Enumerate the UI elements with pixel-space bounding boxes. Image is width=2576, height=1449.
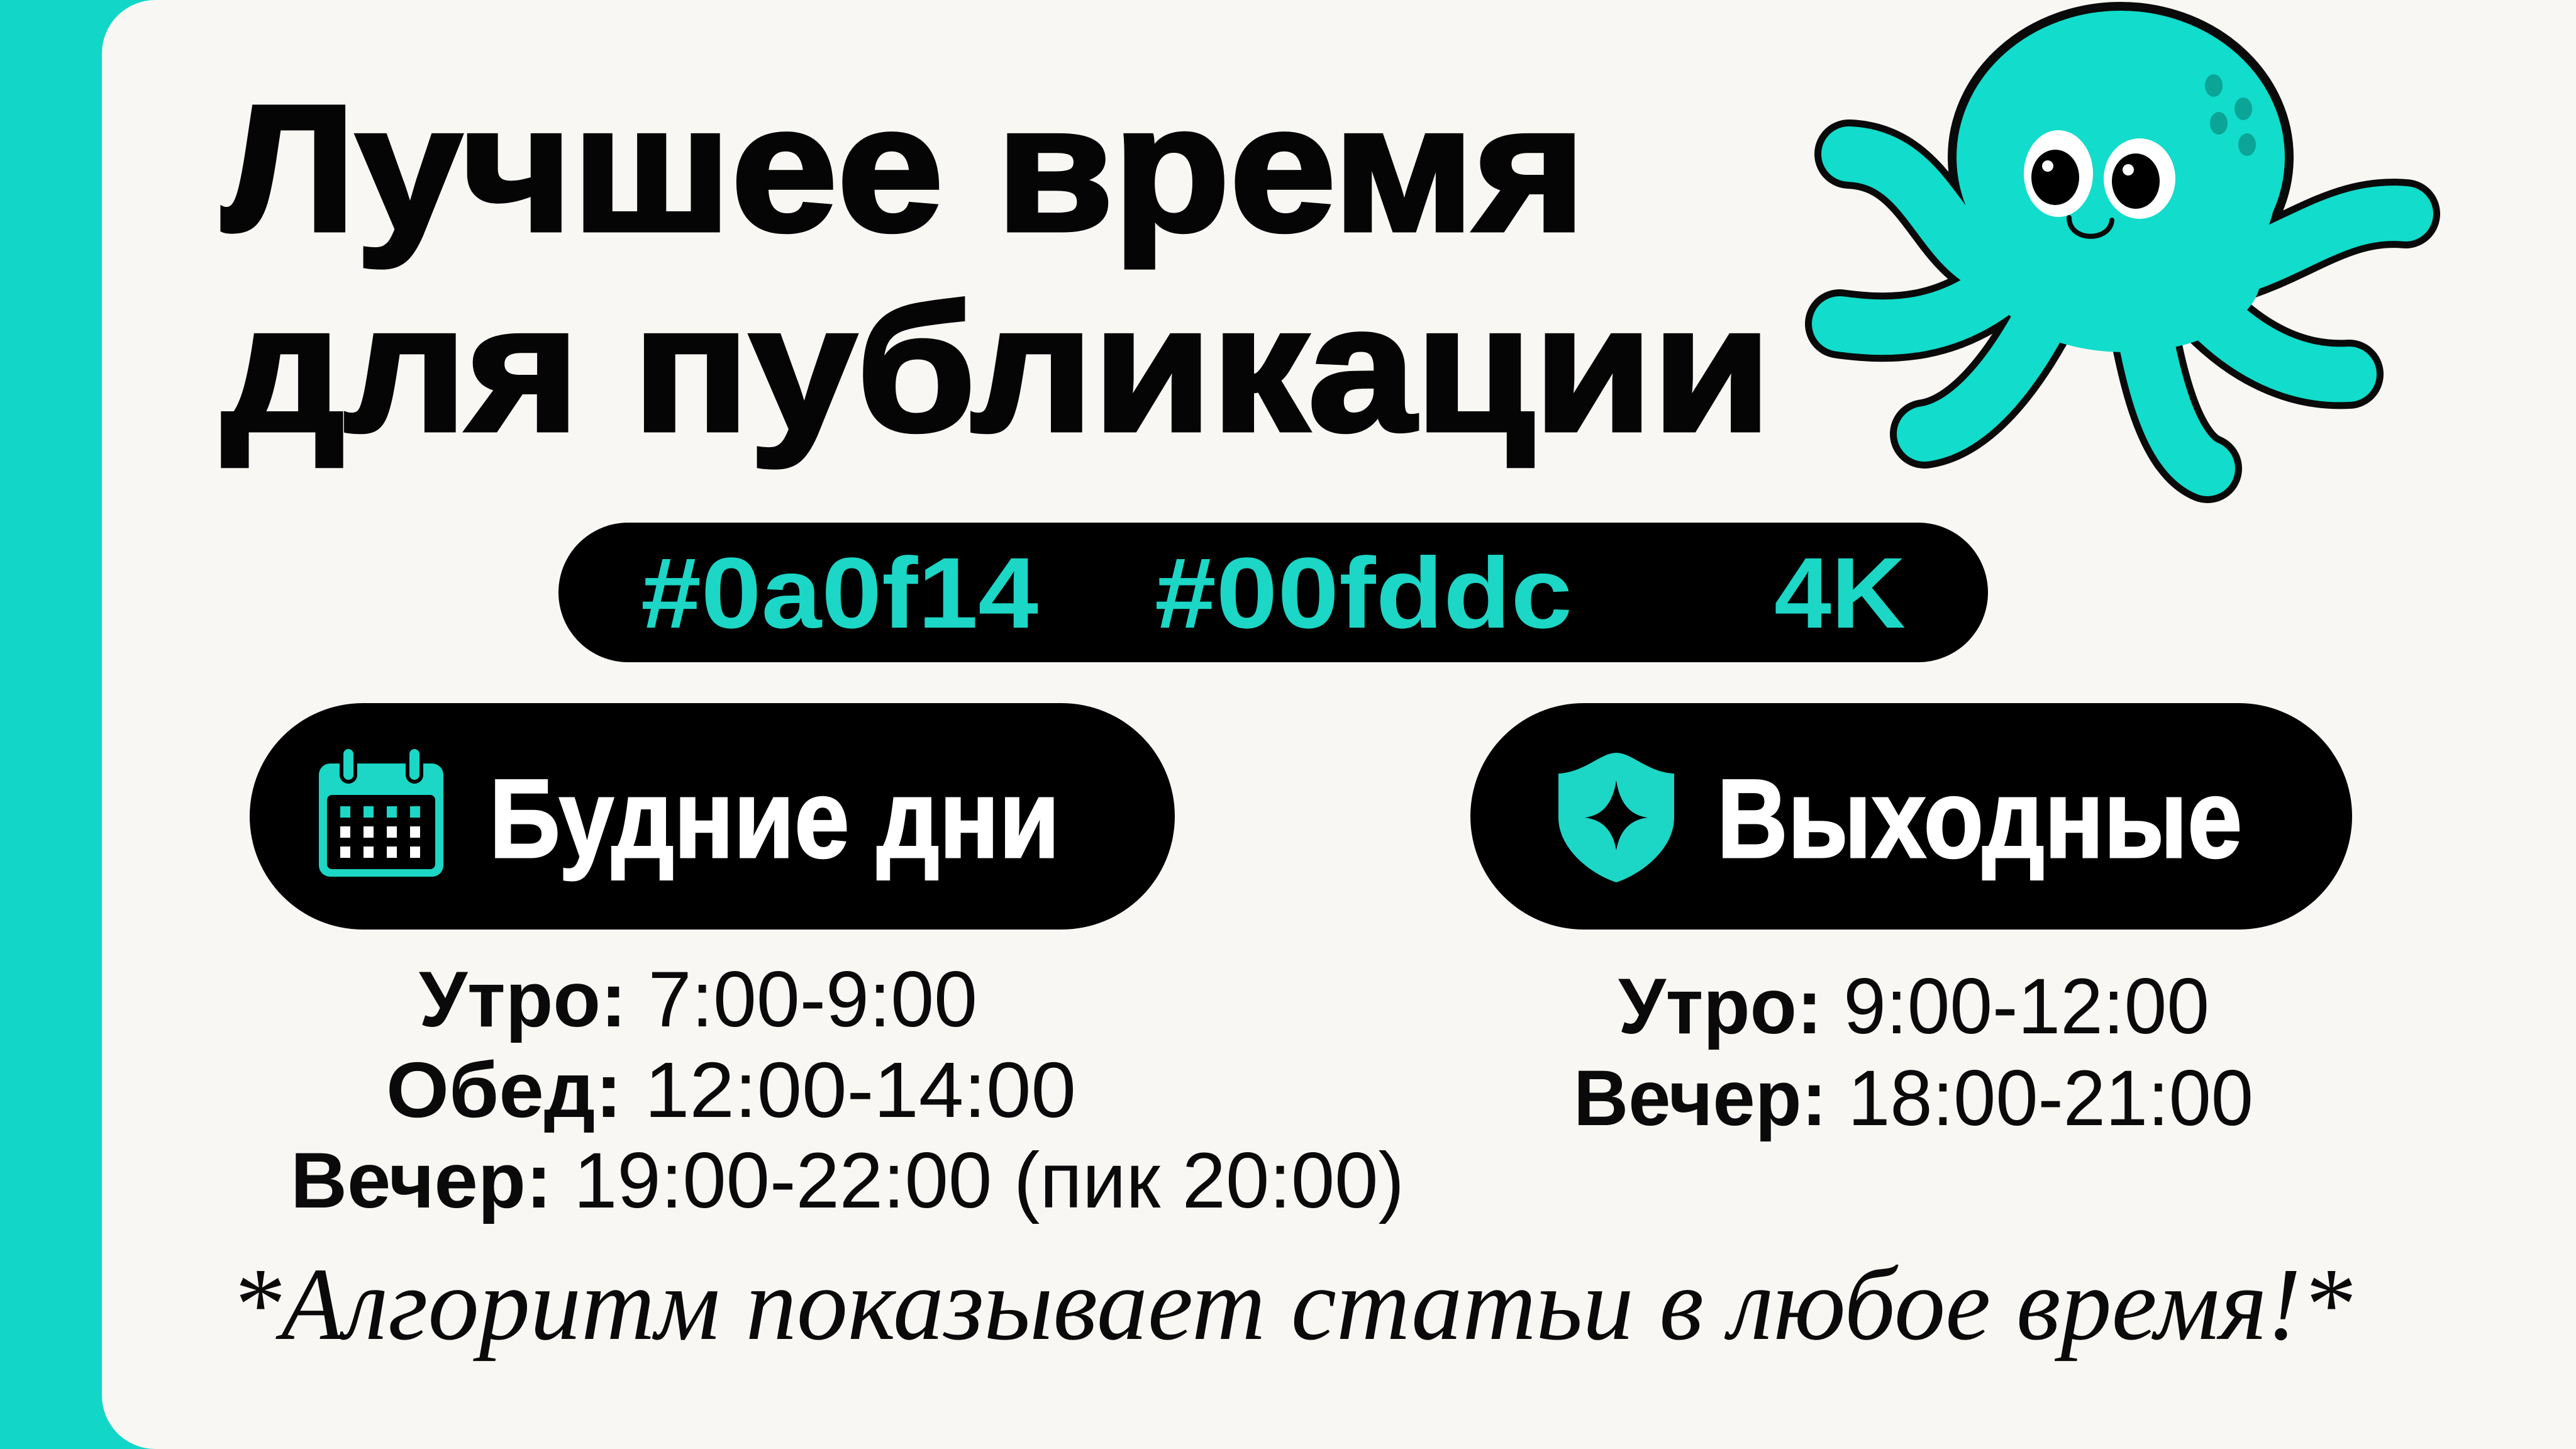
text block: weekday times: [291, 956, 1404, 1224]
text block: weekend times: Утро: 9:00-12:00: [1618, 963, 2209, 1050]
panel: weekend header pill: [1470, 703, 2352, 930]
hex color pill: #0a0f14: [641, 536, 1038, 649]
hex color pill: [558, 523, 1988, 662]
text block: weekend times: Вечер: 18:00-21:00: [1574, 1055, 2253, 1142]
icon: shield with star: [1558, 753, 1674, 882]
title: [222, 69, 1771, 469]
hex color pill: 4K: [1774, 536, 1906, 649]
footer note: *Алгоритм показывает статьи в любое время!*: [230, 1246, 2352, 1362]
text block: weekday times: Утро: 7:00-9:00: [419, 956, 977, 1043]
panel: weekdays header pill: [250, 703, 1175, 930]
hex color pill: #00fddc: [1155, 536, 1572, 649]
title: Лучшее время: [222, 69, 1585, 269]
icon: calendar: [319, 747, 443, 877]
text block: weekday times: Вечер: 19:00-22:00 (пик 20:00): [291, 1137, 1404, 1224]
title: для публикации: [222, 269, 1771, 469]
panel: weekdays header pill: Будние дни: [489, 756, 1060, 881]
text block: weekday times: Обед: 12:00-14:00: [386, 1046, 1076, 1134]
text block: weekend times: [1574, 963, 2253, 1142]
panel: weekend header pill: Выходные: [1717, 756, 2242, 881]
icon: octopus mascot: [1840, 6, 2406, 469]
